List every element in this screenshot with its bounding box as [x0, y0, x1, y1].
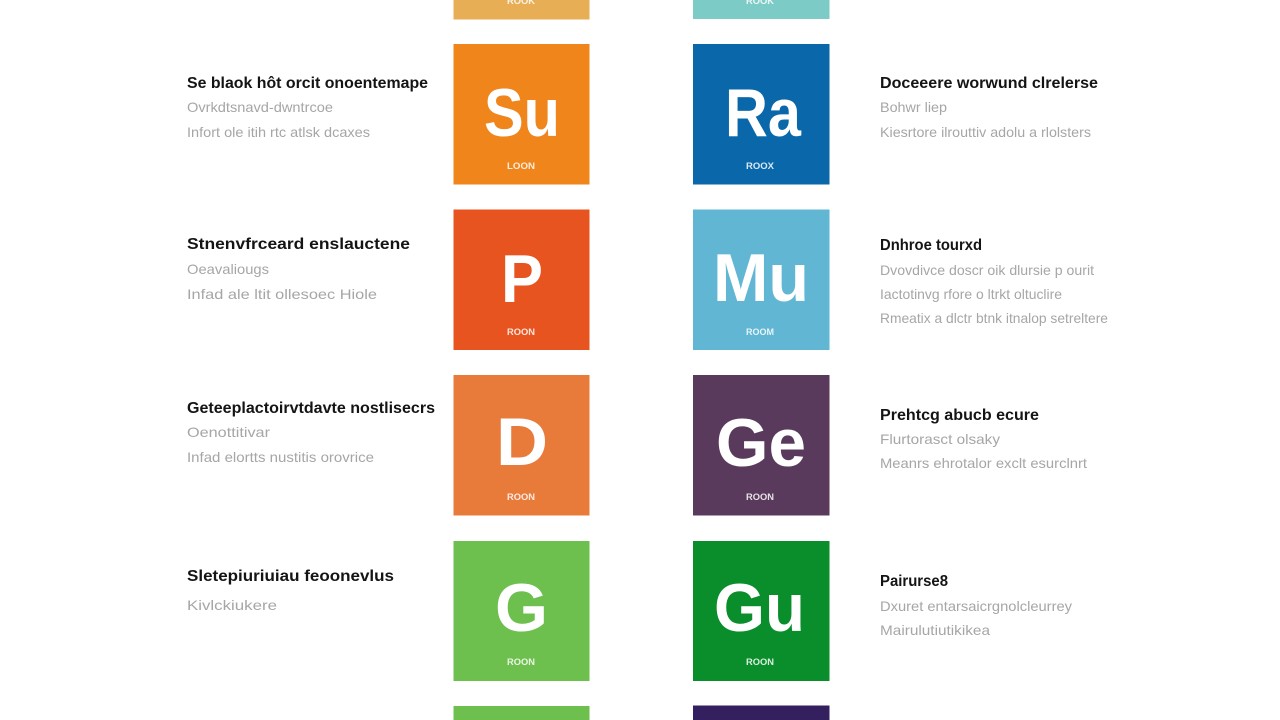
tile: Ge: Ge	[716, 405, 806, 481]
tile: Ra	[693, 44, 830, 184]
tile: Ge: ROON	[746, 492, 774, 502]
text block: row 1 left: Ovrkdtsnavd-dwntrcoe	[187, 99, 333, 115]
tile: Su: Su	[484, 75, 560, 151]
text block: row 4 left: Kivlckiukere	[187, 597, 277, 613]
text block: row 3 left: Infad elortts nustitis orovrice	[187, 449, 374, 465]
text block: row 1 left	[187, 75, 428, 140]
text block: row 2 right: Dnhroe tourxd	[880, 237, 982, 254]
tile: D: ROON	[507, 492, 535, 502]
text block: row 4 left	[187, 568, 394, 613]
text block: row 1 left: Se blaok hôt orcit onoentemape	[187, 75, 428, 92]
text block: row 2 right: Dvovdivce doscr oik dlursie p ourit	[880, 262, 1094, 278]
text block: row 3 right	[880, 407, 1087, 471]
tile: P: ROON	[507, 327, 535, 337]
tile: D: D	[496, 404, 548, 480]
text block: row 2 right: Rmeatix a dlctr btnk itnalop setreltere	[880, 310, 1108, 326]
text block: row 1 right: Kiesrtore ilrouttiv adolu a rlolsters	[880, 124, 1091, 140]
text block: row 2 left: Infad ale ltit ollesoec Hiole	[187, 286, 377, 302]
tile: top right cropped	[693, 0, 830, 19]
tile: P	[454, 210, 590, 350]
tile: G	[454, 541, 590, 681]
text block: row 4 right: Pairurse8	[880, 573, 948, 590]
tile: Ge	[693, 375, 830, 516]
text block: row 3 right: Flurtorasct olsaky	[880, 431, 1000, 447]
text block: row 2 left: Oeavaliougs	[187, 261, 269, 277]
tile: Su: LOON	[507, 161, 535, 171]
text block: row 3 left: Oenottitivar	[187, 424, 270, 440]
tile: Ra: Ra	[725, 75, 802, 151]
text block: row 3 left: Geteeplactoirvtdavte nostlisecrs	[187, 400, 435, 417]
text block: row 2 left: Stnenvfrceard enslauctene	[187, 236, 410, 253]
text block: row 3 right: Meanrs ehrotalor exclt esurclnrt	[880, 455, 1087, 471]
text block: row 3 left	[187, 400, 435, 465]
text block: row 4 right: Mairulutiutikikea	[880, 622, 990, 638]
tile: bottom left cropped	[454, 706, 590, 720]
text block: row 2 right	[880, 237, 1108, 326]
text block: row 4 right	[880, 573, 1072, 638]
text block: row 1 right	[880, 75, 1098, 140]
tile: Su	[454, 44, 590, 184]
tile: Ra: ROOX	[746, 161, 774, 171]
text block: row 4 left: Sletepiuriuiau feoonevlus	[187, 568, 394, 585]
text block: row 3 right: Prehtcg abucb ecure	[880, 407, 1039, 424]
text block: row 4 right: Dxuret entarsaicrgnolcleurrey	[880, 598, 1072, 614]
tile: Mu: Mu	[713, 240, 809, 316]
tile: Gu	[693, 541, 830, 681]
tile: Mu: ROOM	[746, 327, 774, 337]
tile: bottom right cropped	[693, 706, 830, 720]
text block: row 2 right: Iactotinvg rfore o ltrkt oltuclire	[880, 286, 1062, 302]
text block: row 1 left: Infort ole itih rtc atlsk dcaxes	[187, 124, 370, 140]
tile: top left cropped	[454, 0, 590, 20]
tile: Gu: Gu	[714, 570, 805, 646]
tile: P: P	[501, 241, 543, 317]
tile: D	[454, 375, 590, 516]
tile: G: G	[495, 570, 548, 646]
tile: Gu: ROON	[746, 657, 774, 667]
text block: row 2 left	[187, 236, 410, 302]
text block: row 1 right: Doceeere worwund clrelerse	[880, 75, 1098, 92]
tile: G: ROON	[507, 657, 535, 667]
tile: Mu	[693, 210, 830, 350]
text block: row 1 right: Bohwr liep	[880, 99, 947, 115]
